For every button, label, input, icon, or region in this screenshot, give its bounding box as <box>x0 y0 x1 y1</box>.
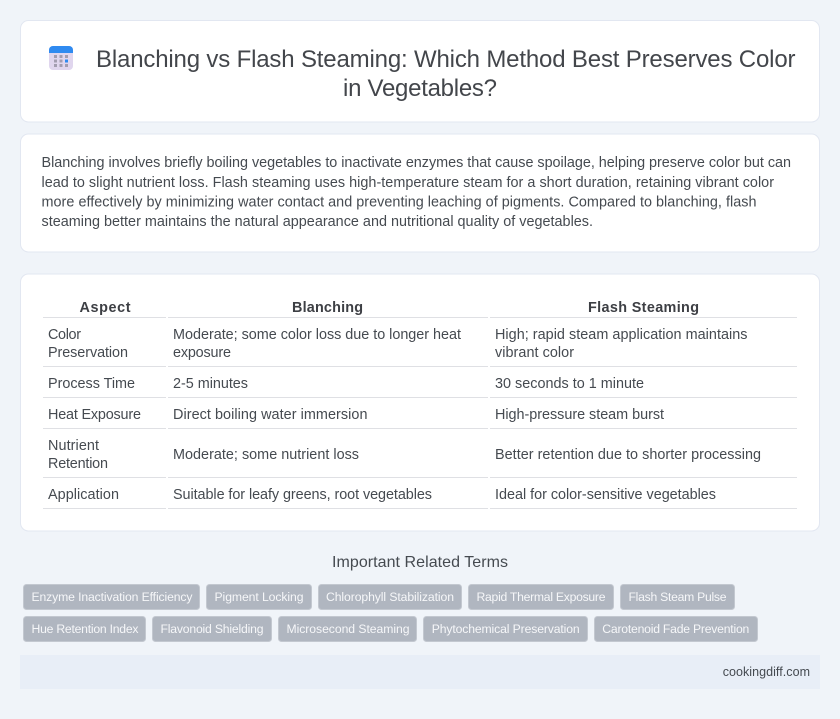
tag: Enzyme Inactivation Efficiency <box>32 590 193 604</box>
row: heat exposure <box>43 407 797 429</box>
row: process time: Process Time <box>48 376 135 392</box>
row: nutrient retention: Nutrient <box>48 438 99 454</box>
row: application: Suitable for leafy greens, root vegetables <box>173 487 432 503</box>
tag <box>206 584 312 610</box>
tag: Pigment Locking <box>214 590 304 604</box>
row: process time <box>43 376 797 398</box>
row: color preservation: Preservation <box>48 345 128 361</box>
tag <box>424 616 588 642</box>
footer <box>20 655 820 689</box>
heading: related terms: Important Related Terms <box>332 554 508 571</box>
panel: introduction text: more effectively by minimizing water contact and preventing leaching of pigments. Compared to blanching, flash <box>42 194 756 210</box>
tag <box>278 616 416 642</box>
tag: Flash Steam Pulse <box>628 590 727 604</box>
table header row: Aspect <box>80 300 131 316</box>
tag: Chlorophyll Stabilization <box>326 590 454 604</box>
tag: Phytochemical Preservation <box>432 622 580 636</box>
panel: introduction text: lead to slight nutrient loss. Flash steaming uses high-temperature steam for a short duration, retaining vibrant color <box>42 175 774 191</box>
tag <box>468 584 614 610</box>
row: color preservation: vibrant color <box>495 345 574 361</box>
icon: calendar <box>49 46 73 70</box>
row: color preservation: exposure <box>173 345 231 361</box>
row: color preservation: Moderate; some color loss due to longer heat <box>173 327 461 343</box>
panel: introduction text: steaming better maintains the natural appearance and nutritional quality of vegetables. <box>42 214 593 230</box>
tag: Rapid Thermal Exposure <box>476 590 606 604</box>
row: process time: 30 seconds to 1 minute <box>495 376 644 392</box>
row: heat exposure: Heat Exposure <box>48 407 141 423</box>
tag <box>24 584 200 610</box>
panel: introduction text: Blanching involves briefly boiling vegetables to inactivate enzymes that cause spoilage, helping preserve color but can <box>42 155 791 171</box>
row: nutrient retention: Moderate; some nutrient loss <box>173 447 359 463</box>
row: process time: 2-5 minutes <box>173 376 248 392</box>
row: color preservation: Color <box>48 327 81 343</box>
row: color preservation <box>43 327 797 367</box>
title: Blanching vs Flash Steaming: Which Method Best Preserves Color <box>96 46 796 73</box>
related term tags <box>24 584 758 642</box>
row: color preservation: High; rapid steam application maintains <box>495 327 748 343</box>
tag <box>620 584 734 610</box>
panel: title header <box>20 20 820 122</box>
title <box>96 46 796 102</box>
row: nutrient retention: Better retention due to shorter processing <box>495 447 761 463</box>
tag: Carotenoid Fade Prevention <box>602 622 749 636</box>
row: heat exposure: High-pressure steam burst <box>495 407 664 423</box>
table header row: Flash Steaming <box>588 300 699 316</box>
title: in Vegetables? <box>343 75 497 102</box>
table header row <box>43 300 797 318</box>
panel: comparison table <box>20 274 820 531</box>
row: application <box>43 487 797 509</box>
row: nutrient retention: Retention <box>48 456 108 472</box>
tag <box>152 616 272 642</box>
row: application: Application <box>48 487 119 503</box>
tag: Hue Retention Index <box>32 622 138 636</box>
row: heat exposure: Direct boiling water immersion <box>173 407 368 423</box>
row: application: Ideal for color-sensitive vegetables <box>495 487 716 503</box>
footer: cookingdiff.com <box>723 665 810 679</box>
tag <box>594 616 758 642</box>
row: nutrient retention <box>43 438 797 478</box>
tag: Flavonoid Shielding <box>160 622 264 636</box>
panel: introduction text <box>20 134 820 252</box>
tag <box>318 584 462 610</box>
tag <box>24 616 146 642</box>
tag: Microsecond Steaming <box>286 622 410 636</box>
table header row: Blanching <box>292 300 363 316</box>
